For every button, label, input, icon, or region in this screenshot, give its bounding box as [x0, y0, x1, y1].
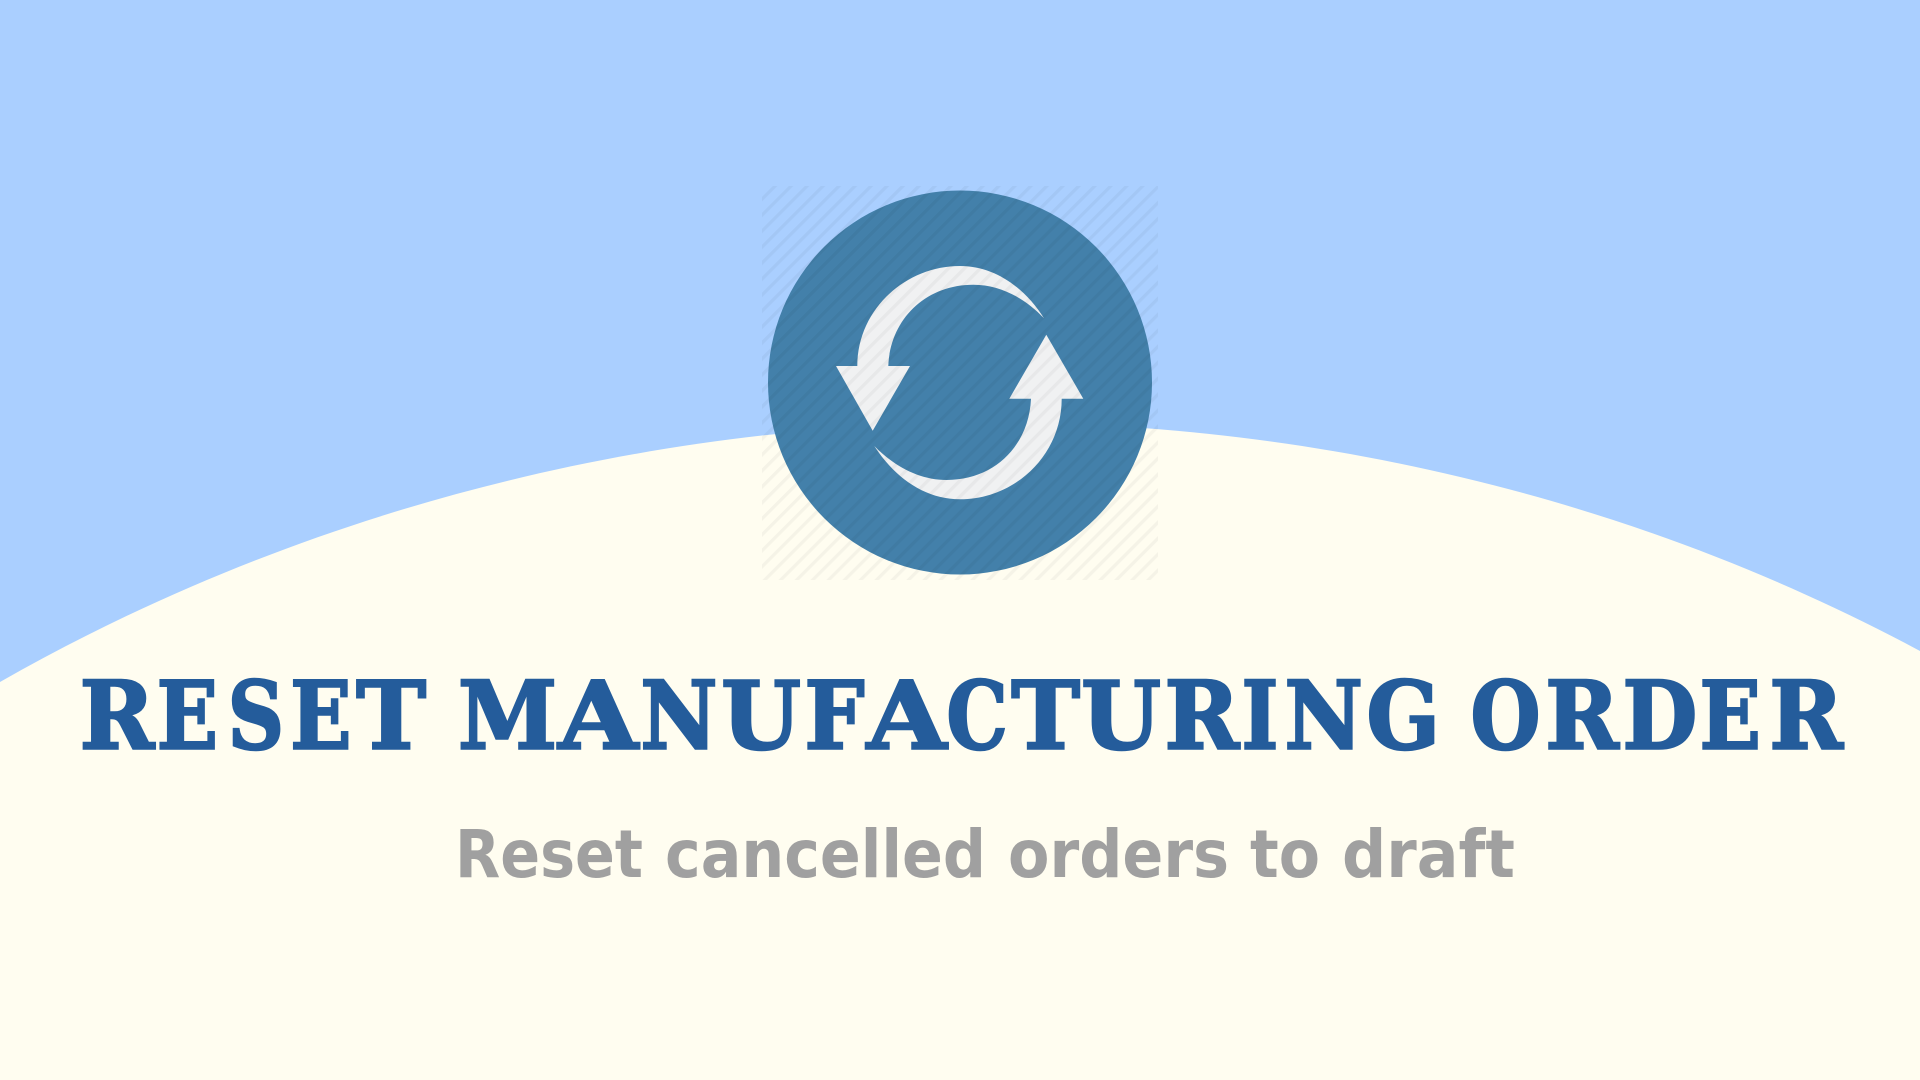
- subtitle: draft: [1342, 816, 1515, 893]
- title: I: [1242, 662, 1278, 772]
- icon disc: [768, 190, 1152, 574]
- title: U: [1081, 662, 1161, 772]
- title: E: [1700, 662, 1761, 772]
- title: A: [557, 662, 639, 772]
- title: F: [804, 662, 864, 772]
- title: M: [458, 662, 557, 772]
- subtitle: Reset: [455, 816, 643, 893]
- title: T: [1011, 662, 1080, 772]
- title: E: [157, 662, 218, 772]
- title: E: [290, 662, 351, 772]
- arrow: bottom-right, pointing up: [874, 335, 1083, 499]
- title: N: [640, 662, 718, 772]
- title: N: [1284, 662, 1363, 772]
- title: G: [1366, 662, 1440, 772]
- title: R: [1164, 662, 1240, 772]
- title: C: [946, 662, 1008, 772]
- subtitle: cancelled: [665, 816, 986, 893]
- diagonal hatch overlay: [762, 186, 1158, 580]
- subtitle: to: [1250, 816, 1320, 893]
- title: U: [721, 662, 801, 772]
- background: cream hill: [0, 422, 1920, 1080]
- title: O: [1471, 662, 1540, 772]
- title: T: [356, 662, 426, 772]
- title: R: [1545, 662, 1620, 772]
- arrow: top-left, pointing down: [836, 266, 1044, 431]
- title: A: [866, 662, 948, 772]
- icon: reset arrows in circle: [762, 186, 1158, 580]
- title: D: [1622, 662, 1697, 772]
- title: R: [1769, 662, 1844, 772]
- title: R: [80, 662, 155, 772]
- subtitle: orders: [1008, 816, 1229, 893]
- title: S: [228, 662, 284, 772]
